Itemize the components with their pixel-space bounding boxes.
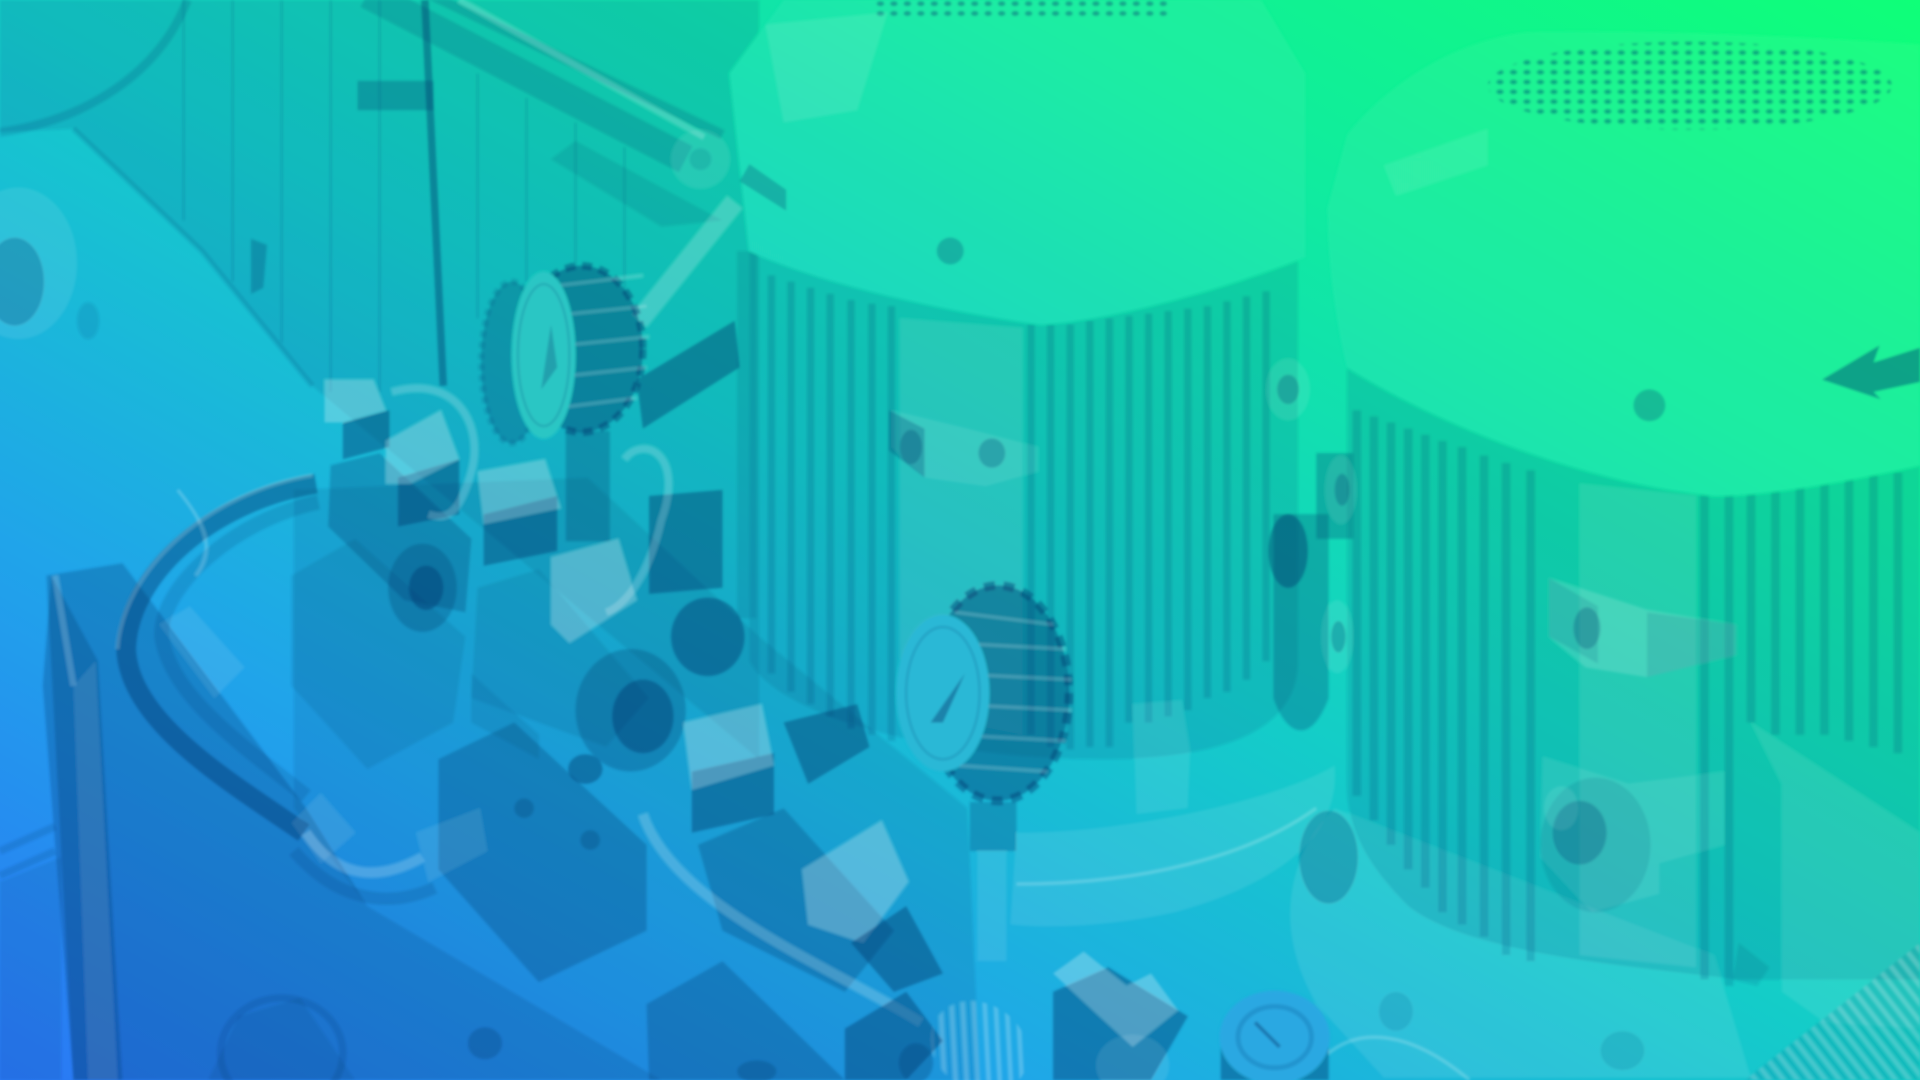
valve bank backing	[294, 478, 980, 1080]
hydraulic tank	[0, 563, 661, 1080]
cap arrow	[1822, 345, 1920, 399]
corrugated hose bottom centre	[845, 982, 1046, 1080]
right motor fins	[1357, 410, 1898, 986]
right motor upper bracket	[1549, 578, 1736, 677]
bottom connector and round gauge	[1053, 951, 1469, 1080]
floor edge and wall hole	[0, 129, 312, 386]
light and dark side pipes	[637, 202, 740, 429]
right motor fan cap	[1327, 31, 1920, 496]
back wall	[0, 0, 759, 759]
cable top left	[0, 0, 187, 132]
small gauge pair	[481, 266, 649, 541]
left motor fins	[771, 276, 1266, 749]
right motor lower bracket	[1540, 757, 1724, 912]
main hydraulic hoses	[118, 475, 487, 899]
left motor base disc	[1010, 359, 1335, 926]
left motor body	[737, 251, 1298, 759]
corrugated hose bottom right	[1745, 943, 1920, 1080]
left motor mounting bracket	[889, 410, 1190, 814]
right side panel	[1733, 722, 1920, 1029]
left motor fan cap	[730, 0, 1305, 324]
right motor base disc	[1290, 808, 1751, 1078]
right motor body	[1316, 367, 1920, 986]
bottom left fitting	[220, 798, 776, 1080]
manifold blocks	[291, 453, 894, 1080]
hose loops and cylinders	[388, 388, 744, 784]
overhead pipes and pole	[358, 0, 730, 386]
thin white cable	[643, 814, 921, 1022]
large gauge	[896, 585, 1071, 961]
solenoid valve connectors	[324, 380, 943, 992]
